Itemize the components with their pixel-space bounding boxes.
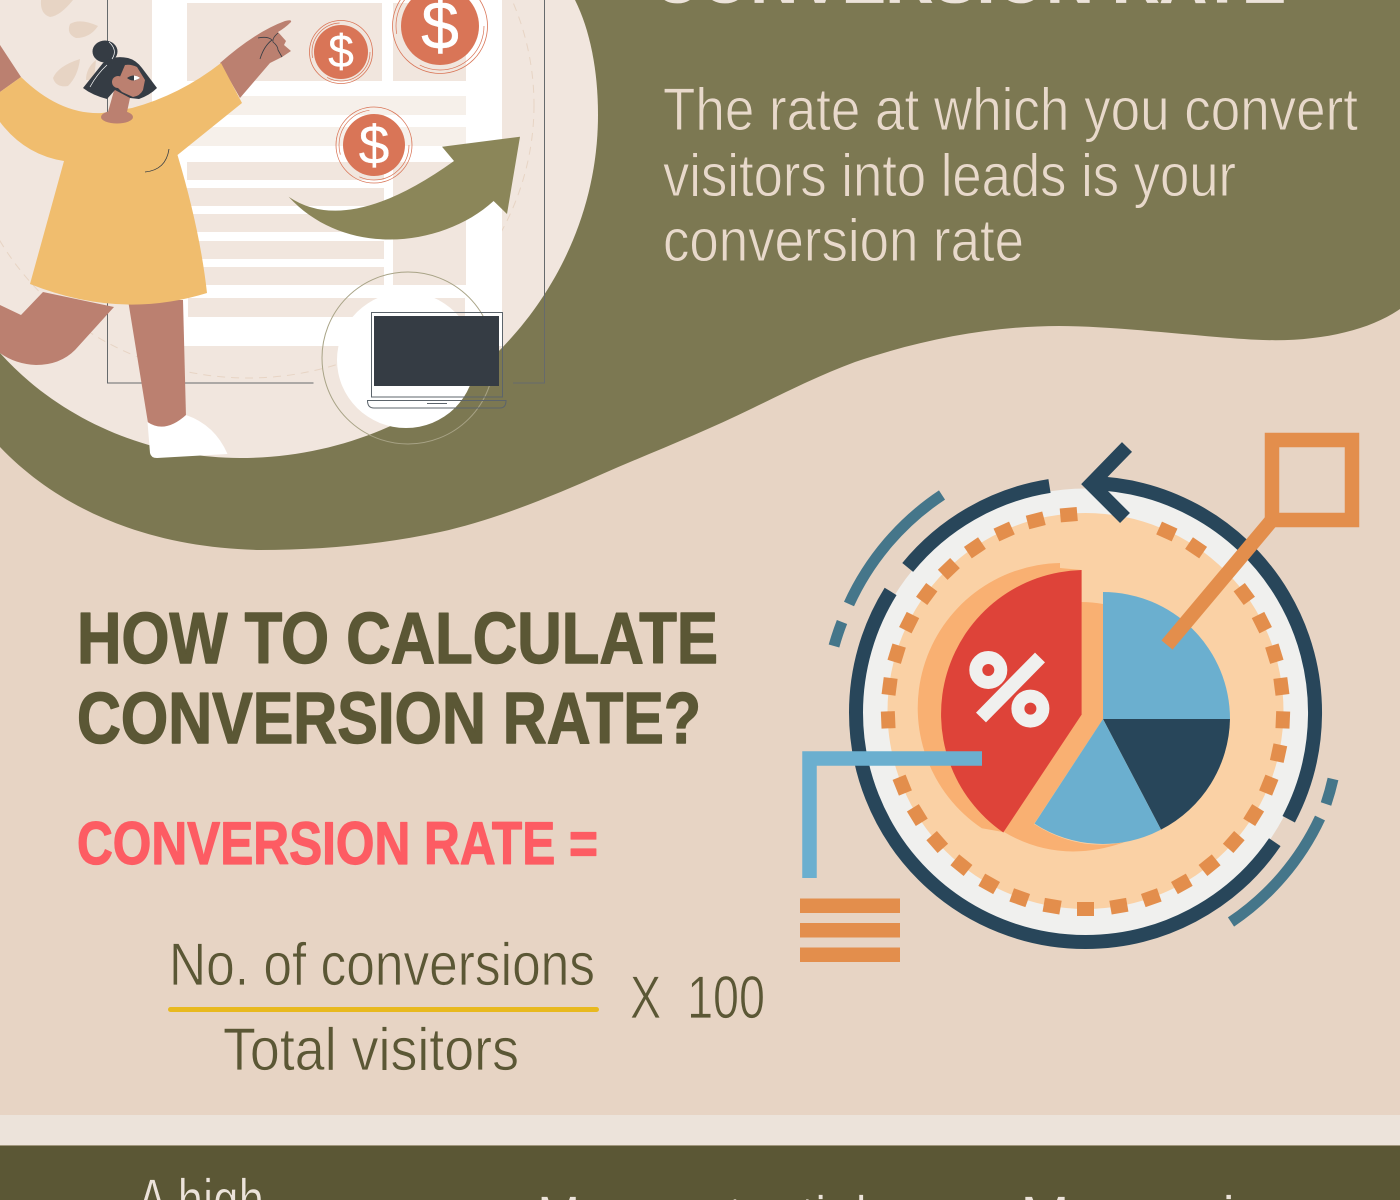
blue callout bracket: [810, 758, 982, 878]
icon: leaves: [41, 0, 98, 86]
icon: dollar coin small: $: [328, 25, 354, 77]
icon: laptop: [322, 272, 506, 444]
heading: how to calculate: HOW TO CALCULATE: [77, 599, 718, 679]
arrowhead on ring: [1091, 447, 1127, 518]
olive wave header background: [0, 0, 1400, 550]
text block: definition: conversion rate: [663, 207, 1024, 274]
icon: dollar coin large: [392, 0, 488, 74]
pie slices: [1103, 592, 1230, 719]
thin page frame: [108, 0, 544, 383]
formula label: CONVERSION RATE =: [77, 810, 598, 877]
arrow: upward growth: [289, 137, 520, 239]
light divider band: [0, 1115, 1400, 1145]
icon: dollar coin medium: [336, 107, 412, 183]
orange underlay: [918, 563, 1082, 832]
panel: illustration of woman and web page: [0, 0, 598, 458]
heading: how to calculate: CONVERSION RATE?: [77, 679, 701, 759]
icon: dollar coin medium: $: [359, 114, 389, 176]
formula fraction: [168, 931, 765, 1083]
formula fraction: No. of conversions: [169, 931, 595, 998]
orange lines icon: [800, 898, 900, 962]
web page: [152, 0, 502, 346]
heading: how to calculate: [77, 599, 718, 759]
text block: definition: [663, 76, 1358, 274]
pie chart graphic: [800, 440, 1352, 962]
formula fraction: Total visitors: [223, 1016, 519, 1083]
navy outer ring: [856, 483, 1315, 942]
red slice with percent icon: [941, 570, 1082, 832]
teal arcs: [834, 495, 1333, 922]
icon: dollar coin small: [310, 20, 372, 84]
woman figure: [0, 20, 291, 458]
orange callout square and line: [1167, 440, 1352, 645]
panel: bottom dark band: [0, 1146, 1400, 1200]
dashed dial ring: [881, 507, 1290, 916]
text block: definition: visitors into leads is your: [663, 142, 1236, 209]
formula fraction: X 100: [630, 964, 765, 1031]
